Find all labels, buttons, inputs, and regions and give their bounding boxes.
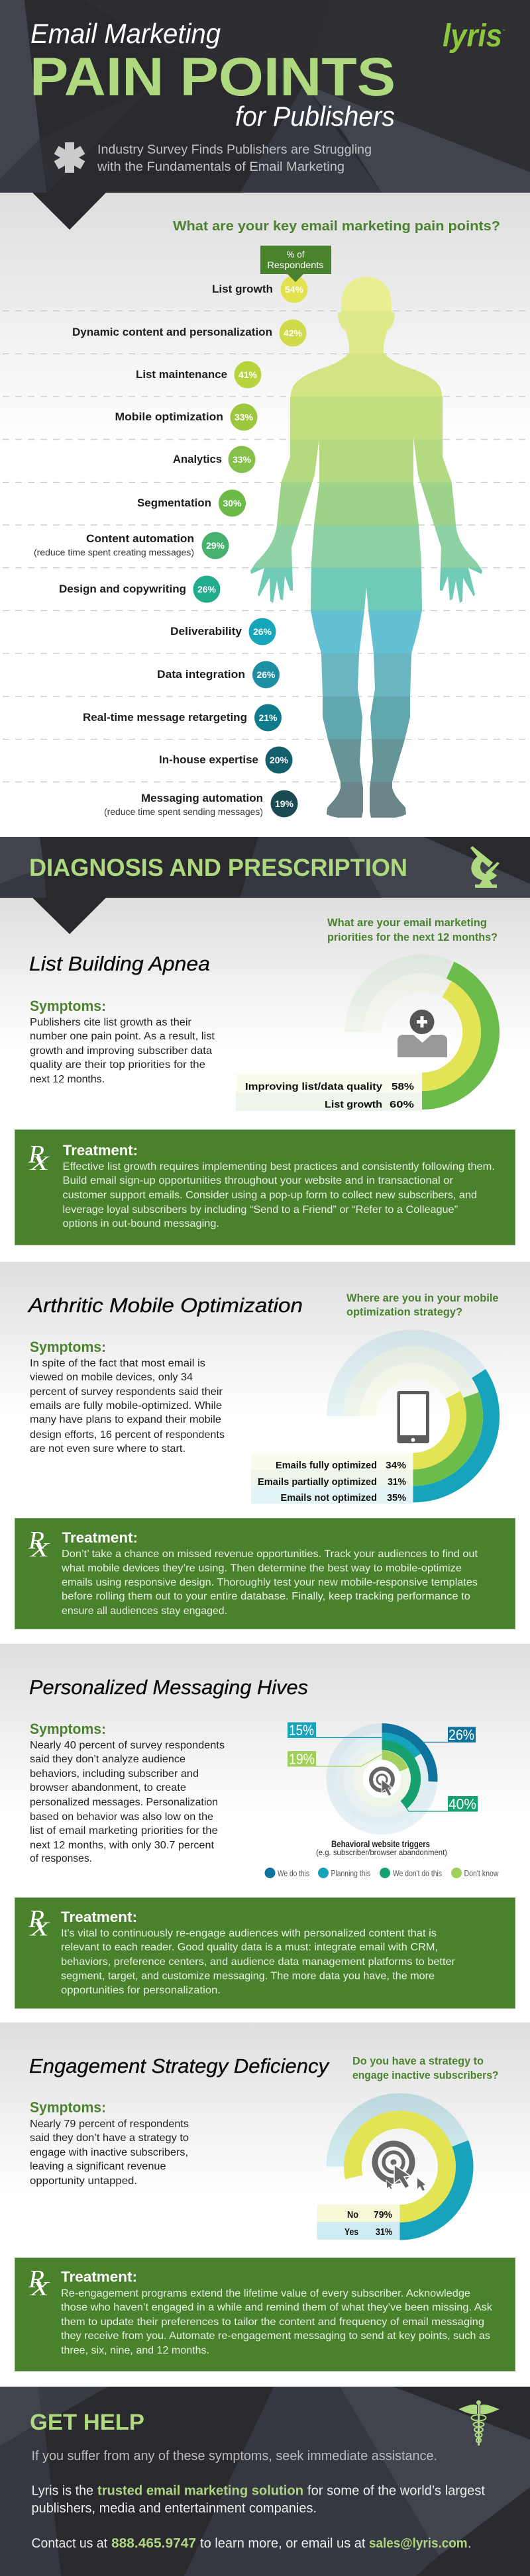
symptoms text: viewed on mobile devices, only 34	[30, 1372, 193, 1383]
icon: smartphone	[398, 1391, 429, 1443]
row: list growth	[212, 275, 307, 303]
chart: behavioral triggers rings	[326, 1723, 437, 1835]
treatment text: those who haven’t engaged in a while and remind them of what they’ve been missing. Ask	[61, 2302, 493, 2313]
symptoms text	[30, 1017, 215, 1085]
chart question	[327, 917, 498, 943]
icon: Rx: X	[28, 1538, 50, 1561]
symptoms text: leaving a significant revenue	[30, 2161, 166, 2172]
chart legend table: Emails fully optimized	[276, 1460, 377, 1471]
chart: mobile optimization rings	[335, 1338, 492, 1494]
chart question	[346, 1292, 498, 1318]
row: data integration	[157, 661, 280, 689]
chart legend table: No	[347, 2209, 358, 2220]
symptoms text: based on behavior was also low on the	[30, 1811, 213, 1823]
row: analytics	[173, 446, 256, 473]
icon: Rx	[28, 1905, 50, 1940]
row: list growth: 54%	[285, 284, 304, 295]
footer text: contact	[32, 2536, 472, 2551]
footer text: about lyris: for some of the world’s largest	[307, 2484, 485, 2499]
row: content automation: 29%	[206, 540, 225, 551]
row: mobile optimization	[115, 404, 257, 430]
treatment text: them to update their preferences to tailor the content and frequency of email messaging	[61, 2316, 484, 2328]
icon: target with cursors	[375, 2144, 425, 2191]
row: design and copywriting: 26%	[197, 584, 217, 595]
symptoms text: browser abandonment, to create	[30, 1782, 186, 1793]
chart: strategy rings	[335, 2102, 464, 2231]
chart caption: Behavioral website triggers	[331, 1839, 430, 1849]
title: for Publishers	[235, 101, 395, 132]
panel: arthritic mobile optimization	[27, 1294, 303, 1455]
band: diagnosis and prescription: DIAGNOSIS AND PRESCRIPTION	[29, 854, 407, 881]
row: messaging automation	[104, 790, 298, 817]
row: list maintenance	[136, 361, 261, 388]
heading: List Building Apnea	[29, 952, 210, 975]
treatment text: relevant to each reader. Good quality data is a must: integrate email with CRM,	[61, 1942, 438, 1953]
chart legend table: 31%	[388, 1476, 406, 1488]
symptoms text: Publishers cite list growth as their	[30, 1017, 192, 1028]
chart legend: Don't know	[464, 1869, 499, 1878]
footer text: symptoms line: If you suffer from any of these symptoms, seek immediate assistance.	[32, 2449, 437, 2463]
symptoms text	[30, 1740, 225, 1864]
row: dynamic content: Dynamic content and personalization	[72, 326, 272, 338]
icon: person with plus	[398, 1010, 447, 1057]
callout: 15%: 15%	[289, 1722, 314, 1739]
chart question: Where are you in your mobile	[346, 1292, 498, 1304]
row: messaging automation: 19%	[275, 798, 294, 809]
symptoms text: growth and improving subscriber data	[30, 1045, 212, 1057]
title	[30, 18, 396, 132]
treatment text: customer support emails. Consider using a pop-up form to collect new subscribers, and	[62, 1190, 477, 1201]
symptoms text	[30, 1358, 225, 1455]
icon: microscope	[470, 846, 500, 888]
row: data integration: 26%	[256, 669, 276, 680]
chart legend table: 60%	[390, 1099, 414, 1110]
treatment text: segment, target, and customize messaging. The more data you have, the more	[61, 1970, 435, 1982]
band pointer	[32, 898, 106, 934]
icon: Rx	[28, 1527, 50, 1561]
row: dynamic content	[72, 319, 306, 347]
subtitle: with the Fundamentals of Email Marketing	[97, 160, 344, 174]
chart legend: We do this	[278, 1869, 309, 1878]
subtitle	[97, 143, 372, 174]
footer text: contact: .	[468, 2536, 472, 2551]
symptoms text: engage with inactive subscribers,	[30, 2147, 188, 2158]
symptoms text: design efforts, 16 percent of respondents	[30, 1429, 225, 1441]
row: analytics: 33%	[233, 454, 252, 465]
symptoms text: said they don’t have a strategy to	[30, 2132, 189, 2144]
chart legend: We don't do this	[393, 1869, 442, 1878]
symptoms text: behaviors, including subscriber and	[30, 1768, 199, 1780]
row: data integration: Data integration	[157, 668, 245, 681]
symptoms text: of responses.	[30, 1853, 92, 1864]
treatment text: three, six, nine, and 12 months.	[61, 2345, 209, 2356]
row: real-time retargeting: Real-time message retargeting	[83, 711, 247, 724]
treatment panel 4	[15, 2258, 515, 2371]
row: real-time retargeting	[83, 704, 282, 731]
row: design and copywriting	[59, 576, 220, 602]
treatment heading: Treatment:	[63, 1142, 138, 1159]
row: content automation: (reduce time spent creating messages)	[34, 548, 194, 557]
callout: % of respondents	[260, 246, 331, 282]
symptoms text: percent of survey respondents said their	[30, 1386, 223, 1398]
lyris logo: ™	[502, 29, 505, 33]
treatment heading: Treatment:	[61, 2268, 137, 2285]
symptoms text: Nearly 79 percent of respondents	[30, 2119, 189, 2130]
treatment text: ensure all audiences stay engaged.	[62, 1605, 227, 1617]
chart question: Do you have a strategy to	[352, 2055, 484, 2067]
symptoms heading: Symptoms:	[30, 998, 106, 1014]
treatment text	[62, 1161, 495, 1229]
chart legend table: 31%	[376, 2226, 392, 2238]
treatment text	[61, 1928, 456, 1996]
subtitle: Industry Survey Finds Publishers are Struggling	[97, 143, 372, 157]
row: list growth: List growth	[212, 283, 273, 295]
symptoms text: next 12 months.	[30, 1074, 105, 1085]
icon: Rx: R	[28, 2266, 44, 2293]
symptoms heading: Symptoms:	[30, 2099, 106, 2116]
icon: Rx: X	[28, 1917, 50, 1940]
chart: priorities rings	[354, 964, 490, 1100]
icon: Rx: X	[28, 1151, 50, 1174]
treatment text: It’s vital to continuously re-engage audiences with personalized content that is	[61, 1928, 437, 1939]
row: content automation: Content automation	[86, 532, 194, 545]
treatment heading: Treatment:	[61, 1909, 137, 1925]
icon: Rx	[28, 1141, 50, 1174]
footer text: contact: to learn more, or email us at	[200, 2536, 366, 2551]
chart question: What are your email marketing	[327, 917, 487, 929]
symptoms text: Nearly 40 percent of survey respondents	[30, 1740, 225, 1751]
treatment text: Re-engagement programs extend the lifetime value of every subscriber. Acknowledge	[61, 2288, 470, 2299]
treatment text	[61, 1549, 478, 1617]
symptoms heading: Symptoms:	[30, 1339, 106, 1355]
lyris logo: lyris	[443, 19, 502, 54]
row: segmentation: 30%	[223, 498, 242, 508]
chart question: optimization strategy?	[346, 1306, 462, 1318]
symptoms text: quality are their top priorities for the	[30, 1059, 205, 1071]
row: deliverability	[170, 618, 276, 645]
symptoms text: emails are fully mobile-optimized. While	[30, 1400, 222, 1411]
treatment text: they receive from you. Automate re-engagement messaging to send at key points, such as	[61, 2330, 490, 2342]
callout: 40%: 40%	[449, 1795, 476, 1813]
treatment text: emails using responsive design. Thoroughly test your new mobile-responsive templates	[62, 1577, 478, 1588]
row: segmentation	[137, 490, 246, 516]
row: messaging automation: Messaging automation	[141, 792, 263, 804]
callout: 26%: 26%	[449, 1727, 474, 1743]
footer text: contact: 888.465.9747	[111, 2536, 196, 2551]
chart legend table: Improving list/data quality	[245, 1081, 383, 1092]
row: in-house expertise	[159, 747, 293, 773]
panel: list building apnea	[29, 952, 215, 1085]
symptoms text: said they don’t analyze audience	[30, 1754, 186, 1765]
footer text: contact: Contact us at	[32, 2536, 107, 2551]
footer text: about lyris: trusted email marketing solution	[97, 2484, 303, 2499]
human body silhouette with colour bands	[245, 271, 490, 822]
row: list maintenance: 41%	[238, 369, 258, 380]
treatment text: what mobile devices they’re using. Then determine the best way to mobile-optimize	[61, 1562, 462, 1574]
icon: Rx: R	[28, 1141, 44, 1169]
panel: personalized messaging hives	[29, 1676, 308, 1864]
chart question: engage inactive subscribers?	[352, 2070, 498, 2081]
row: design and copywriting: Design and copywriting	[59, 583, 186, 595]
treatment text: Effective list growth requires implementing best practices and consistently following them.	[62, 1161, 495, 1172]
footer band	[0, 2387, 530, 2576]
chart legend table	[317, 2205, 400, 2240]
icon: Rx	[28, 2266, 50, 2300]
symptoms text: personalized messages. Personalization	[30, 1797, 218, 1808]
symptoms text	[30, 2119, 189, 2187]
panel: engagement strategy deficiency	[29, 2054, 331, 2187]
row: deliverability: 26%	[253, 626, 272, 637]
treatment text: opportunities for personalization.	[61, 1985, 221, 1996]
footer text: about lyris: Lyris is the	[32, 2484, 93, 2499]
chart legend table	[236, 1074, 422, 1111]
treatment text: leverage loyal subscribers by including “Send to a Friend” or “Refer to a Colleague”	[62, 1204, 458, 1216]
treatment text: before rolling them out to your entire database. Finally, keep tracking performance to	[62, 1591, 470, 1602]
section background: engagement	[0, 2023, 530, 2195]
chart question	[352, 2055, 498, 2081]
heading: Engagement Strategy Deficiency	[29, 2054, 331, 2077]
section background: list building apnea	[0, 898, 530, 1049]
title: PAIN POINTS	[30, 47, 396, 107]
treatment panel 1	[15, 1129, 515, 1245]
chart legend table: Emails not optimized	[281, 1492, 377, 1503]
callout: % of respondents: Respondents	[268, 260, 324, 270]
row: mobile optimization: Mobile optimization	[115, 410, 223, 423]
row: list maintenance: List maintenance	[136, 368, 227, 381]
chart legend table: 58%	[392, 1081, 414, 1092]
chart question: priorities for the next 12 months?	[327, 931, 498, 943]
symptoms text: many have plans to expand their mobile	[30, 1414, 221, 1425]
symptoms text: number one pain point. As a result, list	[30, 1031, 215, 1042]
section background: personalized messaging	[0, 1644, 530, 1815]
chart legend table: 35%	[387, 1492, 406, 1503]
callout: 19%: 19%	[289, 1750, 315, 1768]
header pointer	[32, 193, 106, 230]
header band	[0, 0, 530, 230]
section background: mobile	[0, 1262, 530, 1417]
symptoms text: list of email marketing priorities for the	[30, 1825, 218, 1837]
callout lines	[316, 1737, 448, 1811]
treatment panel 2	[15, 1519, 515, 1629]
icon: Rx: X	[28, 2277, 50, 2300]
treatment text	[61, 2288, 493, 2356]
symptoms heading: Symptoms:	[30, 1721, 106, 1737]
treatment text: Don’t’ take a chance on missed revenue opportunities. Track your audiences to find out	[62, 1549, 478, 1560]
row: in-house expertise: In-house expertise	[159, 753, 258, 766]
title: Email Marketing	[30, 18, 221, 49]
chart caption	[316, 1839, 447, 1857]
row: in-house expertise: 20%	[270, 755, 289, 765]
treatment text: Build email sign-up opportunities throughout your website and in transactional or	[62, 1175, 454, 1186]
row: mobile optimization: 33%	[235, 412, 254, 422]
footer text: about lyris: publishers, media and entertainment companies.	[32, 2501, 317, 2516]
row: messaging automation: (reduce time spent sending messages)	[104, 807, 263, 817]
row: segmentation: Segmentation	[137, 497, 211, 509]
treatment heading: Treatment:	[62, 1529, 138, 1546]
footer text: about lyris	[32, 2484, 485, 2516]
row: analytics: Analytics	[173, 453, 222, 465]
chart legend table: List growth	[325, 1099, 382, 1110]
icon: Rx: R	[28, 1527, 44, 1554]
symptoms text: are not even sure where to start.	[30, 1443, 186, 1455]
icon: caduceus	[458, 2401, 500, 2446]
footer text: contact: sales@lyris.com	[369, 2536, 468, 2551]
section background: pain points	[0, 193, 530, 444]
chart legend	[265, 1868, 499, 1878]
symptoms text: opportunity untapped.	[30, 2175, 137, 2187]
heading: Personalized Messaging Hives	[29, 1676, 308, 1699]
symptoms text: In spite of the fact that most email is	[30, 1358, 205, 1369]
chart legend table: Yes	[344, 2226, 358, 2238]
treatment panel 3	[15, 1897, 515, 2009]
treatment text: options in out-bound messaging.	[62, 1218, 219, 1229]
symptoms text: next 12 months, with only 30.7 percent	[30, 1840, 215, 1851]
chart legend table: 34%	[386, 1460, 406, 1471]
icon: target with cursor	[371, 1769, 393, 1796]
heading: Arthritic Mobile Optimization	[27, 1294, 303, 1317]
question heading: What are your key email marketing pain points?	[173, 219, 500, 234]
treatment text: behaviors, preference centers, and audience data management platforms to better	[61, 1956, 456, 1968]
row: deliverability: Deliverability	[170, 625, 242, 638]
icon: Rx: R	[28, 1905, 44, 1933]
chart legend table: Emails partially optimized	[258, 1476, 377, 1488]
row: dynamic content: 42%	[284, 328, 303, 338]
chart caption: (e.g. subscriber/browser abandonment)	[316, 1848, 447, 1857]
chart legend: Planning this	[331, 1869, 370, 1878]
row: real-time retargeting: 21%	[258, 712, 278, 723]
chart legend table	[251, 1453, 413, 1504]
row: content automation	[34, 532, 229, 559]
icon: medical asterisk	[54, 142, 85, 173]
chart legend table: 79%	[374, 2209, 392, 2220]
get help heading: GET HELP	[30, 2410, 144, 2435]
callout: % of respondents: % of	[286, 250, 305, 260]
band: diagnosis and prescription	[0, 837, 530, 898]
